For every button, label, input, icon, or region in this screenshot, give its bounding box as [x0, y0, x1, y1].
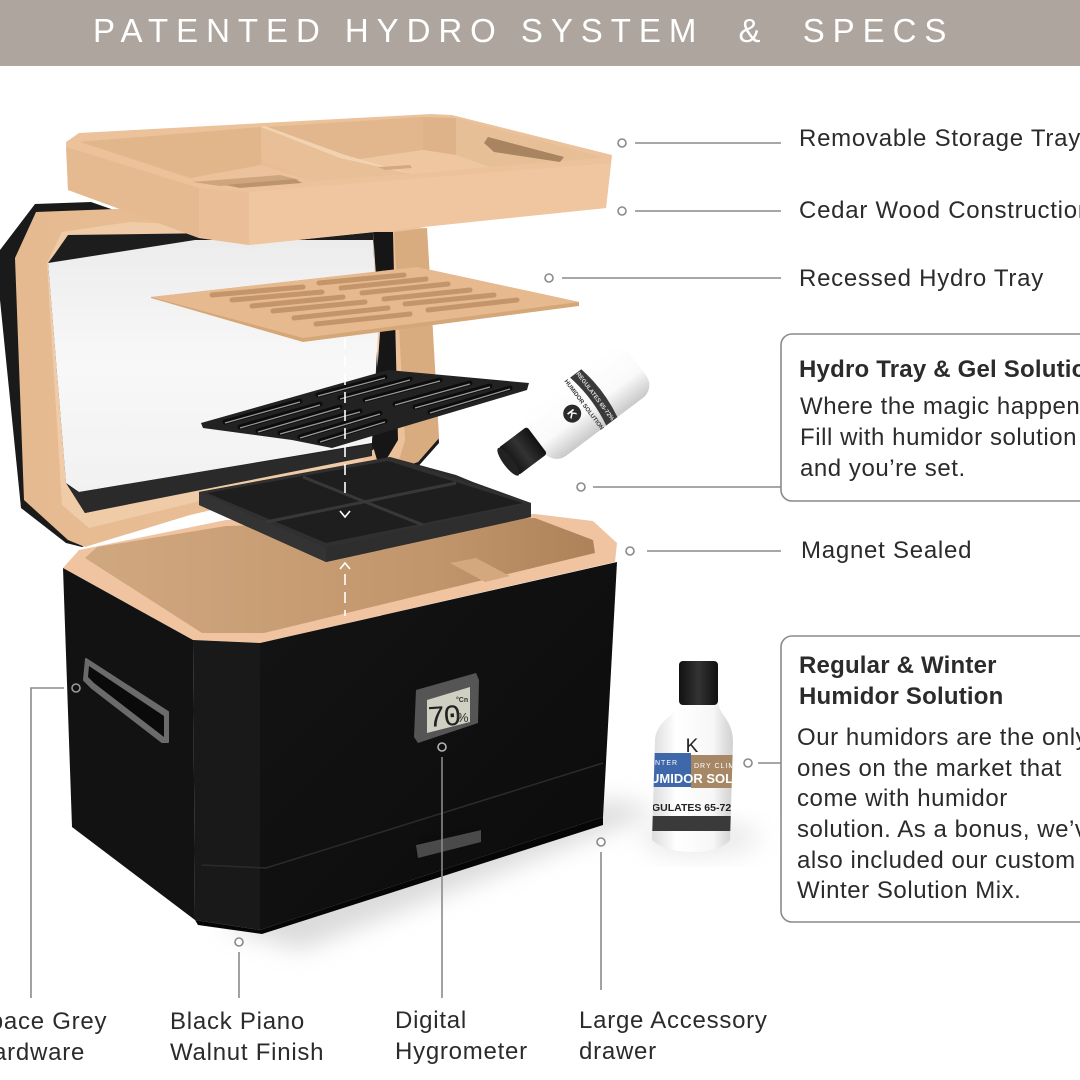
callout: regular and winter humidor solution: Humidor Solution: [799, 683, 1004, 710]
digital hygrometer: 70: [426, 701, 462, 737]
dashed assembly arrow: [340, 338, 350, 616]
tilted humidor solution bottle: HUMIDOR SOLUTION: [563, 379, 604, 431]
title: PATENTED HYDRO SYSTEM & SPECS: [93, 12, 954, 49]
callout: hydro tray and gel solution: [577, 334, 1080, 501]
upright humidor solution bottle: GULATES 65-72% RH: [652, 802, 759, 814]
side handle: [84, 659, 168, 742]
bottle shadow: [640, 820, 760, 856]
label: large accessory drawer: [579, 838, 768, 1065]
label: recessed hydro tray: Recessed Hydro Tray: [799, 265, 1044, 292]
callout: regular and winter humidor solution: [744, 636, 1080, 922]
label: removable storage tray: [618, 125, 1080, 152]
label: large accessory drawer: drawer: [579, 1038, 657, 1065]
callout: regular and winter humidor solution: Regular & Winter: [799, 652, 997, 679]
tilted humidor solution bottle: [486, 340, 656, 489]
removable storage tray: [66, 114, 612, 245]
recessed hydro tray: [151, 267, 579, 342]
label: digital hygrometer: Digital: [395, 1007, 467, 1034]
label: large accessory drawer: Large Accessory: [579, 1007, 768, 1034]
label: cedar wood construction: [618, 197, 1080, 224]
black divided tray: [199, 457, 531, 562]
upright humidor solution bottle: [652, 661, 733, 852]
label: space grey hardware: [0, 684, 107, 1066]
callout: regular and winter humidor solution: come with humidor: [797, 785, 1008, 812]
label: digital hygrometer: Hygrometer: [395, 1038, 528, 1065]
label: black piano walnut finish: Black Piano: [170, 1008, 305, 1035]
tilted humidor solution bottle: K: [564, 407, 579, 421]
tilted humidor solution bottle: REGULATES 65-72%: [574, 371, 615, 423]
label: digital hygrometer: [395, 743, 528, 1065]
label: black piano walnut finish: Walnut Finish: [170, 1039, 324, 1066]
upright humidor solution bottle: K: [686, 736, 699, 757]
digital hygrometer: %: [457, 710, 469, 725]
callout: hydro tray and gel solution: and you’re set.: [800, 455, 966, 482]
label: removable storage tray: Removable Storage Tray: [799, 125, 1080, 152]
black grid tray: [201, 370, 529, 448]
callout: hydro tray and gel solution: Fill with humidor solution: [800, 424, 1077, 451]
humidor lid with mirror: [0, 202, 439, 547]
humidor shadow: [220, 800, 660, 950]
upright humidor solution bottle: UMIDOR SOLUTIC: [650, 771, 764, 786]
humidor body: [63, 562, 617, 934]
upright humidor solution bottle: DRY CLIMA: [694, 763, 741, 770]
header band: [0, 0, 1080, 66]
callout: regular and winter humidor solution: Winter Solution Mix.: [797, 877, 1021, 904]
callout: regular and winter humidor solution: ones on the market that: [797, 755, 1062, 782]
callout: regular and winter humidor solution: also included our custom: [797, 847, 1076, 874]
box interior: [63, 514, 617, 643]
label: magnet sealed: Magnet Sealed: [801, 537, 972, 564]
drawer handle: [416, 824, 481, 858]
digital hygrometer: [414, 673, 479, 743]
digital hygrometer: °Cn: [456, 696, 468, 704]
upright humidor solution bottle: NTER: [655, 760, 678, 767]
label: black piano walnut finish: [170, 938, 324, 1066]
label: recessed hydro tray: [545, 265, 1044, 292]
callout: regular and winter humidor solution: Our humidors are the only: [797, 724, 1080, 751]
label: magnet sealed: [626, 537, 972, 564]
